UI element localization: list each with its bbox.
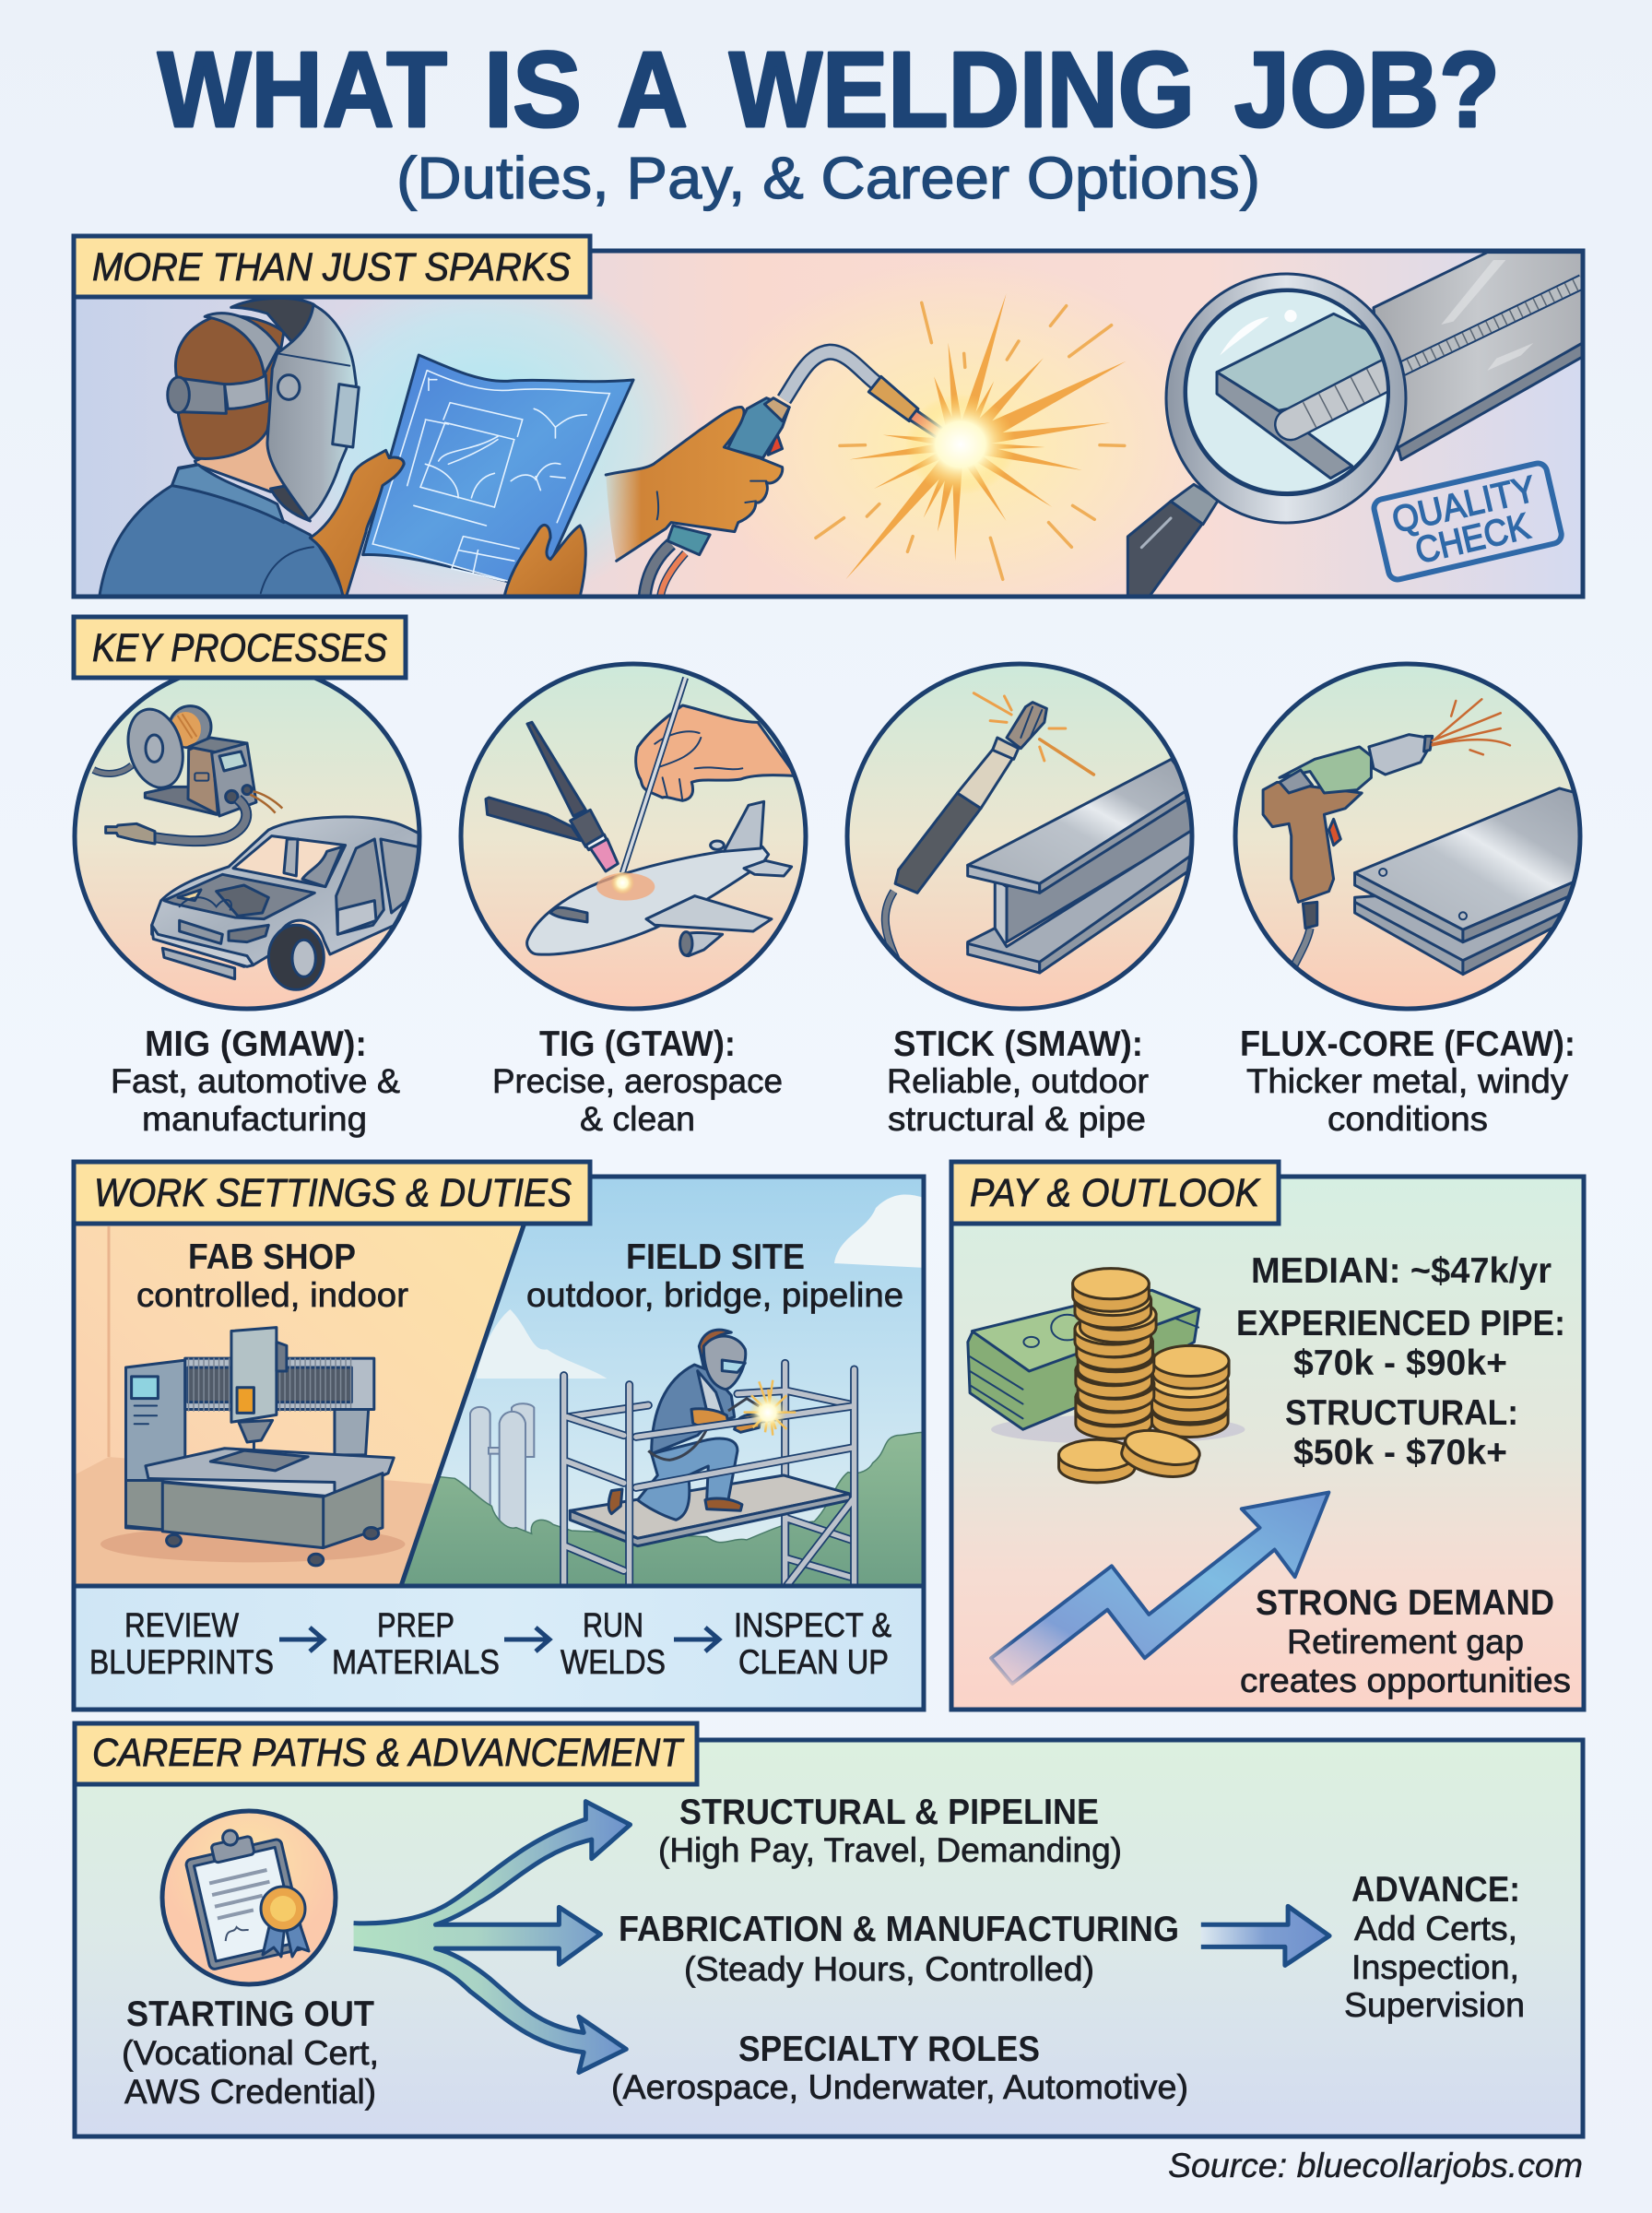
fab shop text: FAB SHOP <box>188 1237 356 1277</box>
process circle: TIG <box>461 664 806 1009</box>
title: JOB? <box>1234 30 1500 149</box>
title: WELDING <box>729 30 1195 149</box>
process circle: FLUX-CORE <box>1235 664 1587 1009</box>
caption: STICK <box>887 1024 1149 1138</box>
magnifying glass <box>1127 274 1406 597</box>
pay figures: $50k - $70k+ <box>1293 1433 1507 1473</box>
step: run welds <box>560 1606 666 1681</box>
diagonal divider <box>401 1177 540 1586</box>
field site text: FIELD SITE <box>626 1237 805 1277</box>
step: review blueprints: BLUEPRINTS <box>89 1643 274 1681</box>
section label: KEY PROCESSES <box>92 626 387 670</box>
step: inspect and clean up: CLEAN UP <box>738 1643 889 1681</box>
pay figures: $70k - $90k+ <box>1293 1343 1507 1383</box>
spark glow <box>765 301 1173 588</box>
quality check stamp: CHECK <box>1411 506 1534 572</box>
CNC machine <box>100 1328 405 1566</box>
advance arrow <box>1201 1906 1329 1965</box>
caption: STICK: STICK (SMAW): <box>893 1024 1143 1064</box>
path: fabrication and manufacturing: (Steady Hours, Controlled) <box>684 1950 1094 1988</box>
caption: FLUX-CORE: FLUX-CORE (FCAW): <box>1240 1024 1575 1064</box>
starting out text <box>122 1994 379 2111</box>
arrow <box>279 1627 324 1651</box>
section label <box>74 617 406 678</box>
path: specialty roles <box>611 2030 1188 2106</box>
caption: MIG: MIG (GMAW): <box>145 1024 367 1064</box>
step: inspect and clean up: INSPECT & <box>734 1606 891 1644</box>
advance text <box>1344 1870 1525 2024</box>
section label <box>951 1162 1279 1224</box>
section label: WORK SETTINGS & DUTIES <box>94 1171 572 1215</box>
path: specialty roles: (Aerospace, Underwater, Automotive) <box>611 2068 1188 2106</box>
welding torch and glove <box>606 352 945 597</box>
fab shop text <box>136 1237 408 1314</box>
pay figures: MEDIAN: ~$47k/yr <box>1251 1251 1552 1291</box>
section label: CAREER PATHS & ADVANCEMENT <box>92 1731 684 1775</box>
pay figures: STRUCTURAL: <box>1285 1393 1518 1433</box>
path: structural and pipeline: (High Pay, Travel, Demanding) <box>658 1831 1122 1869</box>
growth arrow <box>991 1493 1328 1684</box>
welder with helmet <box>100 298 359 597</box>
title <box>158 30 1500 149</box>
magnified weld <box>1217 310 1395 479</box>
spark core <box>909 396 1012 492</box>
quality check stamp <box>1373 462 1564 581</box>
path: fabrication and manufacturing <box>619 1910 1179 1988</box>
panel: work settings and duties <box>74 1162 926 1710</box>
step: prep materials <box>332 1606 500 1681</box>
lens rim <box>1186 290 1388 493</box>
caption: TIG: & clean <box>580 1100 695 1138</box>
pay figures: EXPERIENCED PIPE: <box>1236 1304 1565 1343</box>
subtitle: (Duties, Pay, & Career Options) <box>396 145 1260 211</box>
section label <box>74 1162 590 1224</box>
step: run welds: RUN <box>583 1606 643 1644</box>
quality check stamp: QUALITY <box>1388 468 1540 541</box>
section label <box>75 1723 697 1784</box>
process circle: STICK <box>847 664 1193 1009</box>
section label: PAY & OUTLOOK <box>970 1171 1261 1215</box>
advance text: ADVANCE: <box>1351 1870 1520 1910</box>
caption: FLUX-CORE: Thicker metal, windy <box>1246 1062 1569 1100</box>
duties band <box>74 1586 924 1710</box>
clouds, towers, trees <box>394 1309 925 1589</box>
section label <box>74 236 590 297</box>
advance text: Inspection, <box>1351 1948 1519 1986</box>
icon: cash and coins <box>968 1269 1245 1483</box>
blueprint glow <box>324 299 686 588</box>
banner illustrations <box>100 253 1583 629</box>
starting out text: STARTING OUT <box>126 1994 374 2034</box>
path: specialty roles: SPECIALTY ROLES <box>738 2030 1040 2069</box>
caption: FLUX-CORE <box>1240 1024 1575 1138</box>
field spark <box>749 1394 786 1431</box>
panel: career paths and advancement <box>75 1723 1583 2136</box>
title: WHAT <box>158 30 447 149</box>
caption: TIG <box>492 1024 783 1138</box>
title: A <box>617 30 688 149</box>
icon: certificate clipboard <box>162 1811 336 1984</box>
panel: key processes <box>74 617 1587 1138</box>
section label: MORE THAN JUST SPARKS <box>92 245 571 290</box>
arrow <box>674 1627 719 1651</box>
blueprint <box>363 355 633 584</box>
caption: MIG <box>111 1024 400 1138</box>
strong demand text: Retirement gap <box>1287 1623 1524 1661</box>
strong demand text <box>1240 1583 1571 1699</box>
starting out text: (Vocational Cert, <box>122 2034 379 2072</box>
advance text: Add Certs, <box>1354 1910 1517 1947</box>
caption: TIG: TIG (GTAW): <box>539 1024 736 1064</box>
top cloud <box>834 1195 926 1268</box>
fab shop text: controlled, indoor <box>136 1276 408 1314</box>
starting out text: AWS Credential) <box>124 2073 376 2111</box>
field site text: outdoor, bridge, pipeline <box>526 1276 903 1314</box>
step: review blueprints <box>89 1606 274 1681</box>
pay figures <box>1236 1251 1565 1473</box>
fab shop scene <box>76 1226 522 1584</box>
process circle: MIG <box>75 664 425 1009</box>
caption: MIG: Fast, automotive & <box>111 1062 400 1100</box>
panel: more than just sparks <box>74 236 1583 629</box>
branching arrows <box>354 1802 631 2072</box>
caption: TIG: Precise, aerospace <box>492 1062 783 1100</box>
strong demand text: STRONG DEMAND <box>1256 1583 1554 1623</box>
caption: STICK: Reliable, outdoor <box>887 1062 1149 1100</box>
step: review blueprints: REVIEW <box>124 1606 239 1644</box>
strong demand text: creates opportunities <box>1240 1662 1571 1699</box>
path: structural and pipeline <box>658 1793 1122 1869</box>
caption: FLUX-CORE: conditions <box>1328 1100 1488 1138</box>
title: IS <box>484 30 582 149</box>
weld metal bar <box>1374 253 1583 460</box>
caption: MIG: manufacturing <box>142 1100 367 1138</box>
step: run welds: WELDS <box>560 1643 666 1681</box>
step: prep materials: PREP <box>377 1606 454 1644</box>
sparks <box>816 293 1127 579</box>
field site text <box>526 1237 903 1314</box>
scaffold and welder <box>564 1330 855 1589</box>
path: fabrication and manufacturing: FABRICATION & MANUFACTURING <box>619 1910 1179 1949</box>
gloved hands holding blueprint <box>310 450 585 597</box>
path: structural and pipeline: STRUCTURAL & PIPELINE <box>679 1793 1099 1832</box>
field site scene <box>394 1177 926 1589</box>
arrow <box>504 1627 549 1651</box>
step: inspect and clean up <box>734 1606 891 1681</box>
source: Source: bluecollarjobs.com <box>1168 2147 1583 2184</box>
step: prep materials: MATERIALS <box>332 1643 500 1681</box>
panel: pay and outlook <box>951 1162 1584 1710</box>
advance text: Supervision <box>1344 1986 1525 2024</box>
caption: STICK: structural & pipe <box>888 1100 1146 1138</box>
